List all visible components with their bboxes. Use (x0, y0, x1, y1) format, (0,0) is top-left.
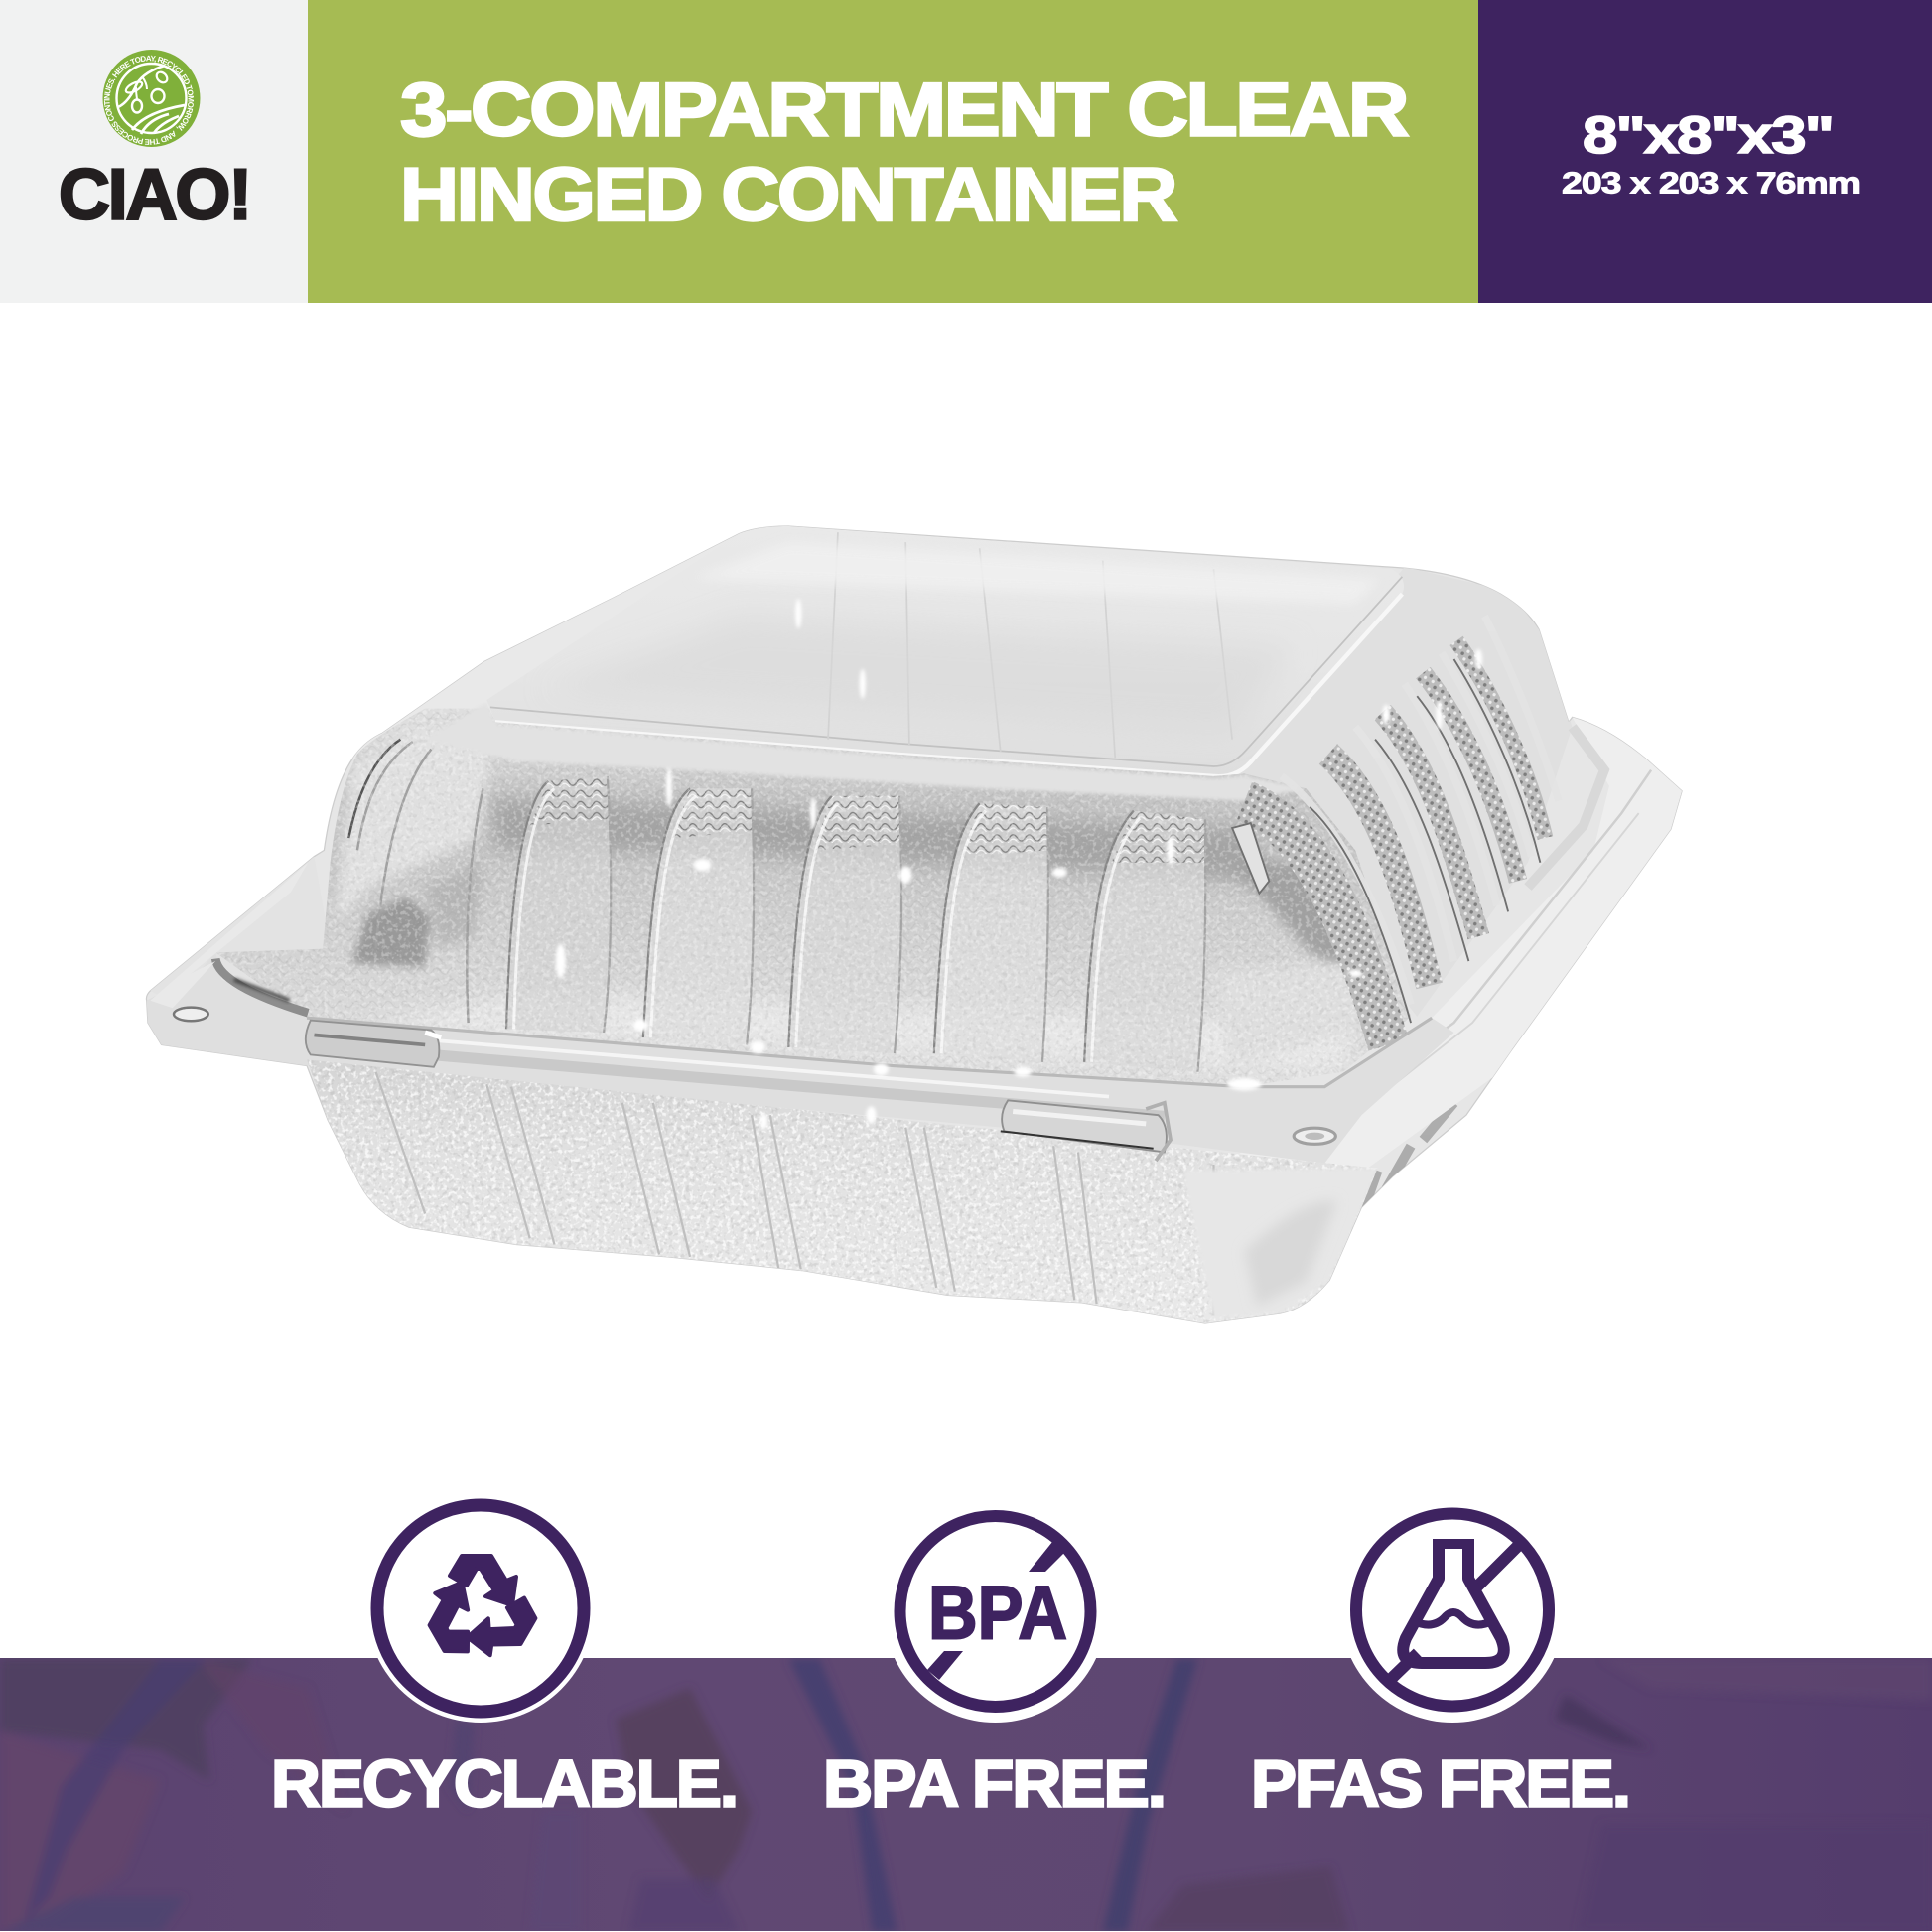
feature: BPA free (823, 1500, 1165, 1821)
leaves: right thin (1557, 1697, 1638, 1747)
light strip under lid panel (425, 702, 1307, 801)
icon: flask crossed out (1340, 1498, 1565, 1723)
product: clear hinged container (146, 526, 1682, 1330)
header: dimensions panel (1478, 0, 1932, 303)
logo wordmark: CIAO! (59, 155, 250, 234)
header: logo panel (0, 0, 308, 303)
icon: BPA crossed out (884, 1500, 1106, 1723)
icon: BPA crossed out: BPA (928, 1571, 1067, 1656)
dimensions in inches: 8"x8"x3" (1583, 106, 1833, 165)
bottom band with leaf background (0, 1658, 1932, 1932)
dimensions in millimetres: 203 x 203 x 76mm (1562, 165, 1860, 201)
clipped container details (147, 526, 1682, 1330)
dark reflection band (492, 798, 1282, 888)
hinge holes (174, 1008, 1335, 1144)
front rim band (147, 1001, 1453, 1163)
icon: recycled olive badge: AND THE PROCESS CONTINUES. HERE TODAY, RECYCLED TOMORROW, (103, 56, 195, 145)
leaves: olive leaf (617, 1688, 752, 1900)
header: title panel (308, 0, 1478, 303)
label: BPA free: BPA FREE. (823, 1747, 1165, 1821)
feature: recyclable (271, 1494, 737, 1821)
label: recyclable: RECYCLABLE. (271, 1747, 737, 1821)
leaves: blue streaks (28, 1662, 199, 1916)
tray flange behind dome (151, 857, 314, 991)
tray ribs (376, 1072, 1213, 1315)
title (400, 68, 1409, 237)
leaves: dark lower region (1153, 1868, 1344, 1930)
title: 3-COMPARTMENT CLEAR (400, 68, 1409, 152)
front ribs (506, 776, 1206, 1072)
tab tip light (151, 952, 216, 1008)
right side ribs (1232, 617, 1559, 1044)
lid side right (1404, 568, 1571, 723)
specular highlights (556, 599, 1482, 1130)
dark left rim reflection (215, 959, 308, 1013)
lid top panel (486, 526, 1404, 776)
left dome fold (357, 742, 483, 1023)
latch left (306, 1021, 441, 1067)
dark left corner (351, 897, 431, 967)
pale left area (336, 727, 492, 924)
title: HINGED CONTAINER (400, 153, 1176, 237)
label: PFAS free: PFAS FREE. (1251, 1747, 1629, 1821)
right flange (1432, 717, 1682, 1122)
icon: recycling badge (366, 1494, 595, 1723)
pale lower glow (369, 992, 1355, 1072)
tray right ribs (1350, 1104, 1457, 1233)
dome front face (209, 702, 1442, 1090)
leaves: dark top left (0, 1659, 252, 1780)
lid shoulder left (352, 533, 740, 759)
container body silhouette (146, 526, 1682, 1323)
feature: PFAS free (1251, 1498, 1629, 1821)
tray lower body (296, 1047, 1392, 1330)
latch right (1001, 1100, 1171, 1161)
